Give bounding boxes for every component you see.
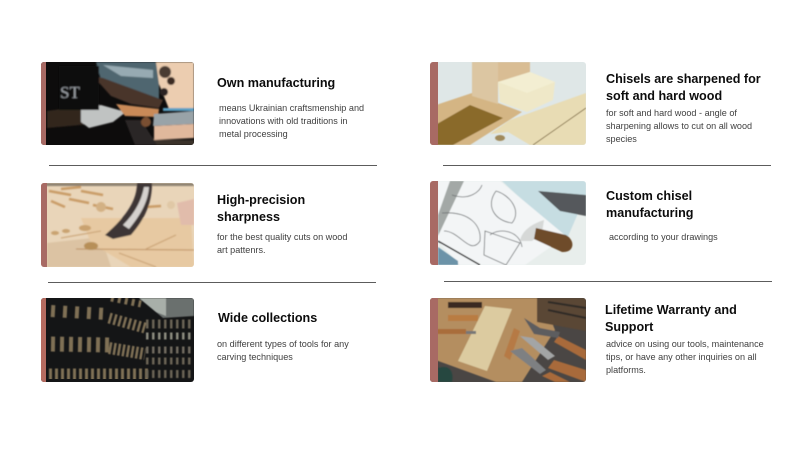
description: metal processing <box>219 129 288 139</box>
description <box>219 103 364 139</box>
description: tips, or have any other inquiries on all <box>606 352 757 362</box>
description: means Ukrainian craftsmenship and <box>219 103 364 113</box>
heading: Wide collections <box>218 311 317 325</box>
description: sharpening allows to cut on all wood <box>606 121 752 131</box>
panel: high-precision sharpness <box>41 183 347 267</box>
description <box>217 339 349 362</box>
photo: metalworker at machine: ST <box>60 83 80 102</box>
heading: Lifetime Warranty and <box>605 303 737 317</box>
heading <box>606 72 761 102</box>
description <box>217 232 347 255</box>
heading: soft and hard wood <box>606 88 722 102</box>
description: art pattenrs. <box>217 245 266 255</box>
divider <box>49 165 377 166</box>
panel: chisels for soft and hard wood <box>430 62 761 145</box>
heading <box>605 303 737 334</box>
description: on different types of tools for any <box>217 339 349 349</box>
divider <box>444 281 772 282</box>
description: species <box>606 134 637 144</box>
description: platforms. <box>606 365 646 375</box>
heading <box>217 193 305 224</box>
heading <box>606 189 693 220</box>
panel: wide collections <box>41 298 349 382</box>
panel: custom chisel manufacturing <box>430 181 718 265</box>
description: innovations with old traditions in <box>219 116 347 126</box>
heading: Own manufacturing <box>217 76 335 90</box>
description <box>606 108 752 144</box>
description: carving techniques <box>217 352 293 362</box>
heading: manufacturing <box>606 206 693 220</box>
photo: drawings with chisel <box>430 181 586 265</box>
panel: lifetime warranty and support <box>430 298 764 382</box>
description <box>606 339 764 375</box>
description: for soft and hard wood - angle of <box>606 108 737 118</box>
description: advice on using our tools, maintenance <box>606 339 764 349</box>
heading: High-precision <box>217 193 305 207</box>
divider <box>443 165 771 166</box>
panel: own manufacturing <box>41 62 364 145</box>
photo: wall of chisels <box>41 298 194 382</box>
divider <box>48 282 376 283</box>
photo: chisel cutting wood <box>41 183 194 267</box>
photo: wood blocks <box>430 62 586 145</box>
description: for the best quality cuts on wood <box>217 232 347 242</box>
photo: metalworker at machine <box>41 62 194 145</box>
heading: Support <box>605 320 653 334</box>
description: according to your drawings <box>609 232 718 242</box>
photo: carving tools on leather <box>430 298 586 382</box>
heading: Custom chisel <box>606 189 692 203</box>
heading: Chisels are sharpened for <box>606 72 761 86</box>
heading: sharpness <box>217 210 280 224</box>
